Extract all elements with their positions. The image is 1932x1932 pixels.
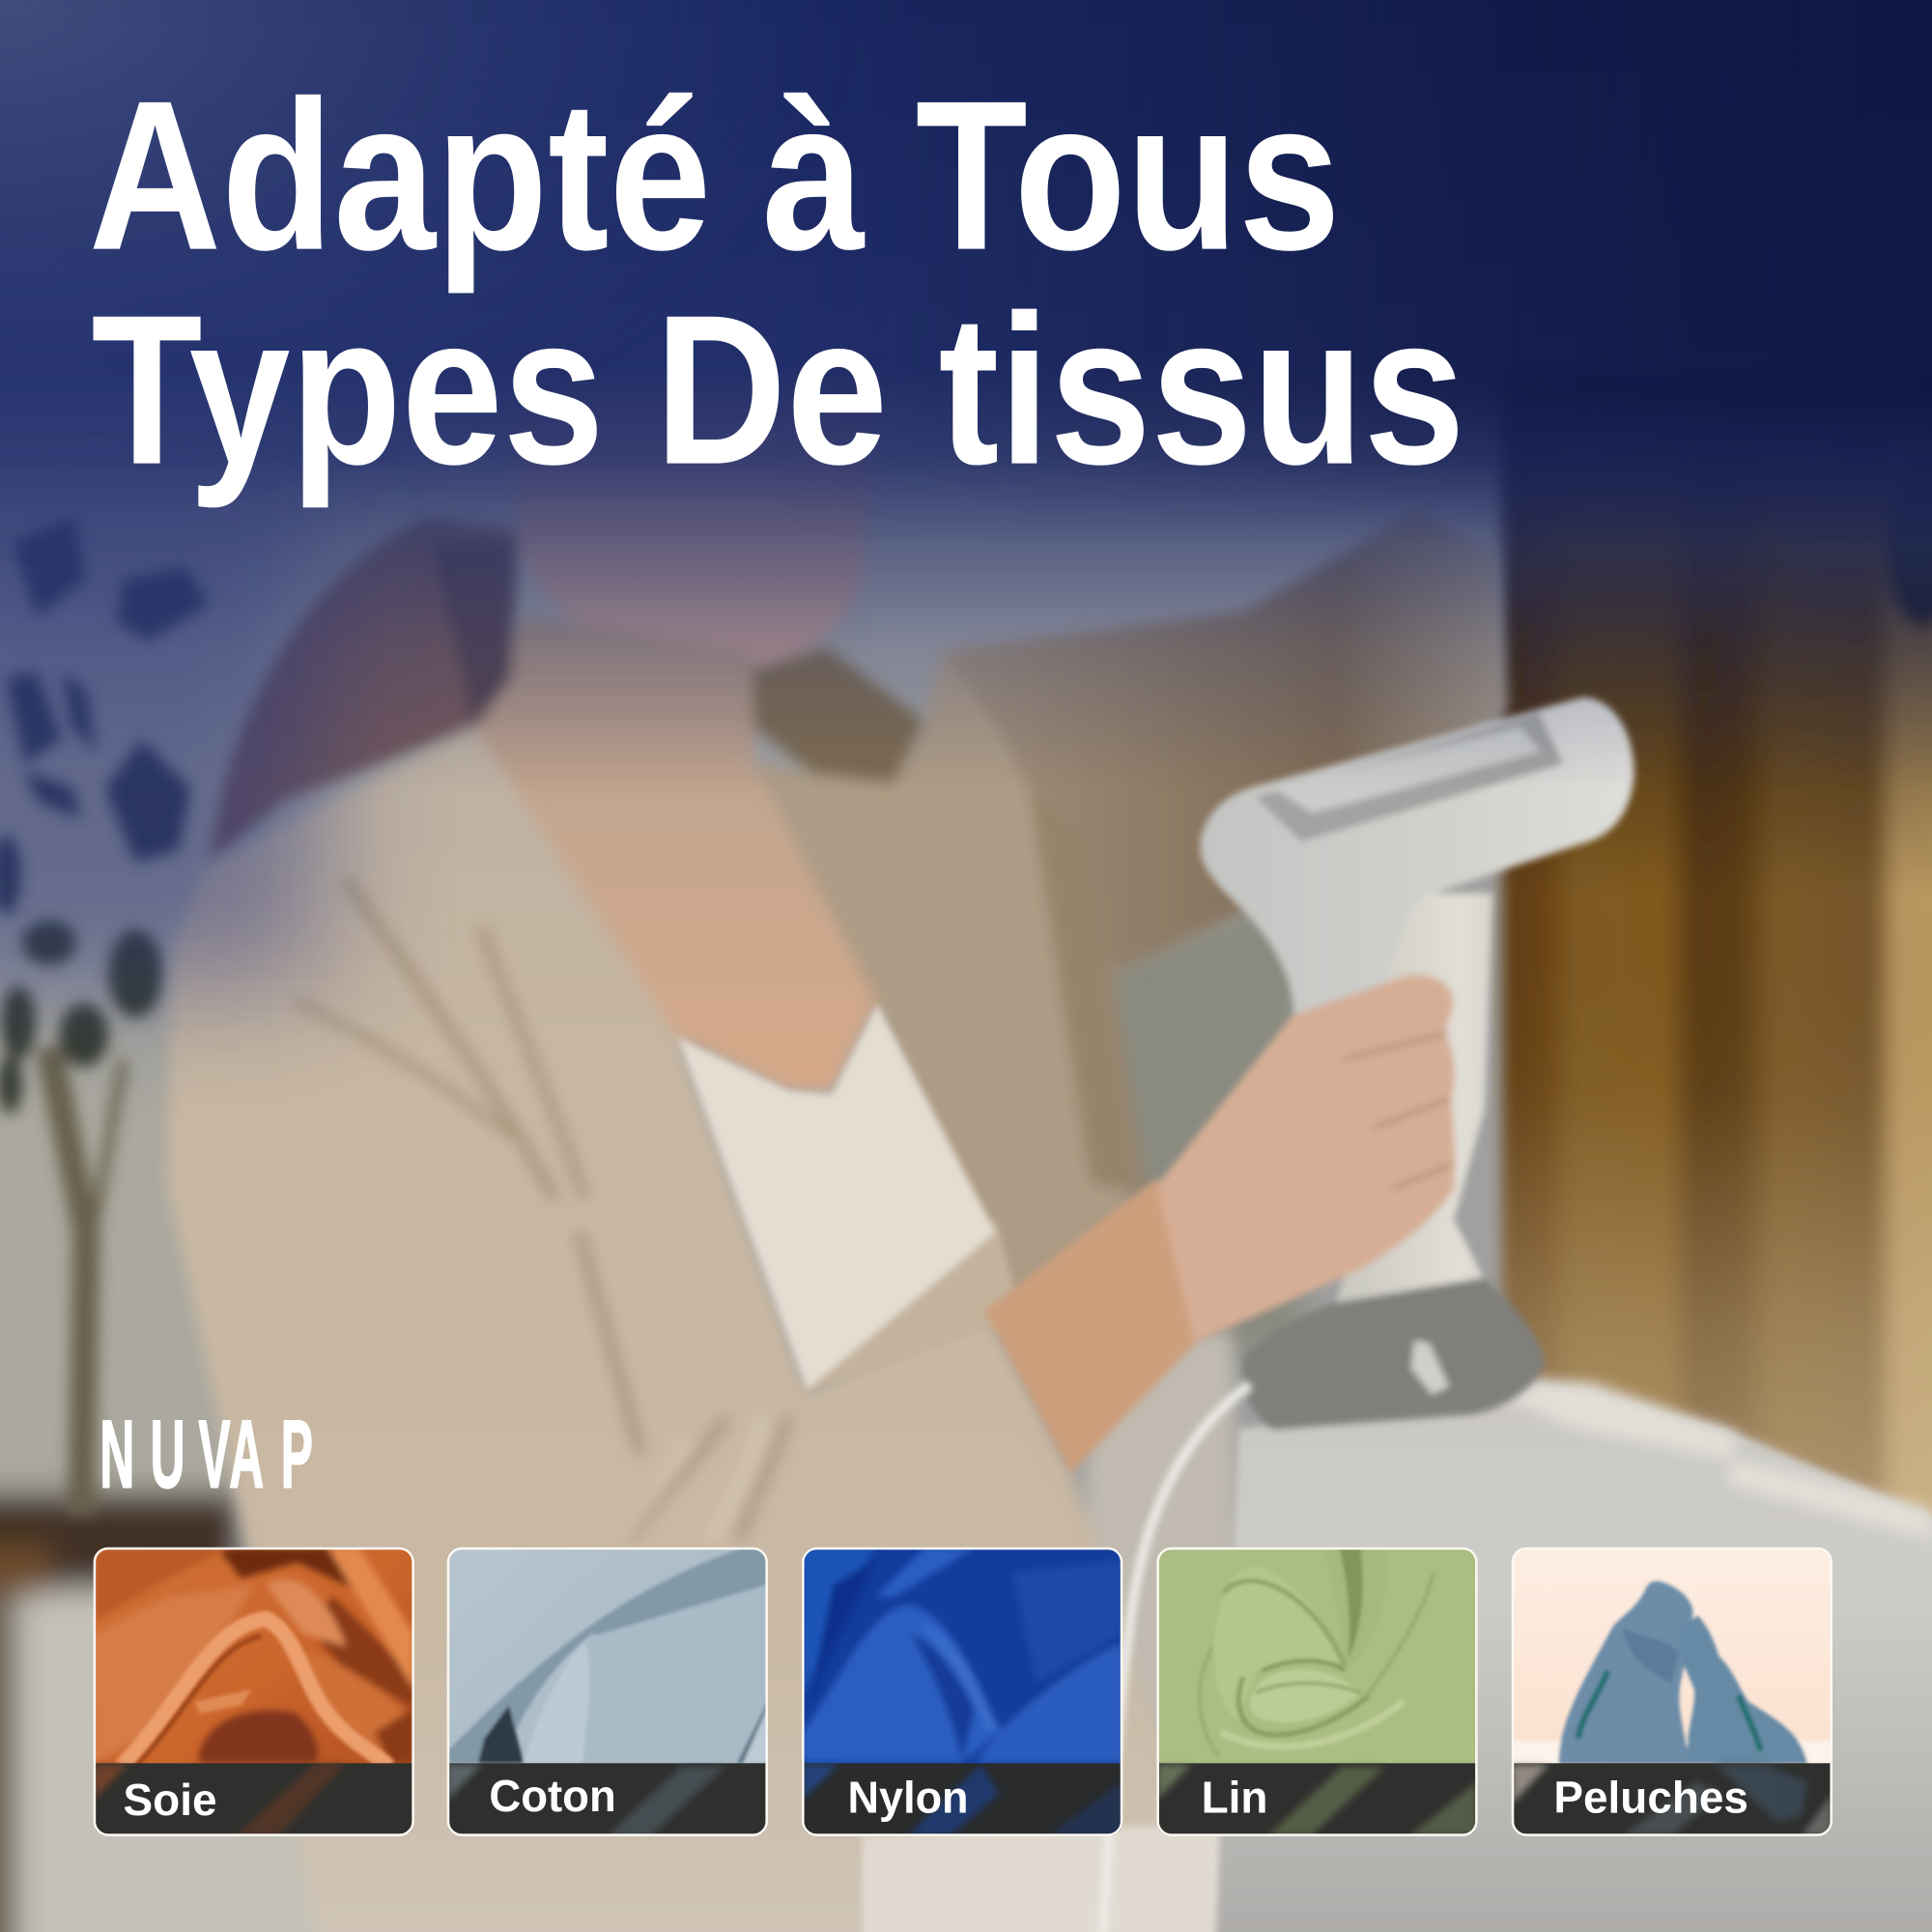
label band [94,1763,414,1836]
raised sleeve [943,513,1506,974]
title: Types De tissus [91,270,1465,509]
area beside sleeve [1084,1331,1244,1932]
base highlight [1410,1341,1449,1395]
steamer top panel [1274,727,1540,813]
steamer grey stripe [1256,712,1564,841]
cotton folds [447,1548,768,1763]
card border [95,1548,413,1835]
cardigan under top [788,1220,1023,1399]
label: Soie [124,1775,216,1825]
silk folds [94,1548,414,1763]
left sofa [18,1589,370,1932]
card border [1513,1548,1832,1835]
title: Adapté à Tous [89,56,1341,295]
cardigan fold lines [296,878,788,1540]
card: Lin [1157,1548,1477,1836]
card border [1158,1548,1476,1835]
wall under raised arm [1096,887,1306,1355]
upper wall [863,469,1503,666]
plant [0,518,210,1516]
forearm [984,1178,1198,1474]
cardigan pleats highlight [622,1417,764,1540]
card: Soie [94,1548,414,1836]
nylon folds [802,1548,1122,1763]
card: Coton [447,1548,768,1836]
navy gradient overlay [0,0,1932,985]
label band [1512,1763,1833,1836]
card: Nylon [802,1548,1122,1836]
board [1213,1380,1932,1932]
steamer base [1242,1278,1545,1430]
card border [803,1548,1122,1835]
white top [678,1005,996,1390]
main cardigan [166,727,1238,1932]
label band [802,1763,1122,1836]
face [515,370,877,667]
right cardigan panel [754,650,1133,1319]
steamer head [1200,697,1634,1018]
label band [447,1763,768,1836]
finger lines [1343,1033,1452,1189]
label: Peluches [1553,1772,1748,1822]
curtain [1502,370,1932,1540]
sofa gap [0,1589,14,1932]
label: Coton [489,1771,616,1821]
plant stems [49,1047,124,1516]
title [89,56,1465,509]
lower left wall [0,1010,234,1528]
label: Nylon [848,1772,969,1822]
plush toys [1512,1581,1833,1766]
left furniture [0,1493,241,1587]
hair right [746,647,924,783]
label: Lin [1202,1772,1267,1822]
linen swirl folds [1199,1548,1435,1757]
neck and chest [474,616,877,1092]
hair left [210,518,518,863]
plant leaves [0,518,210,914]
hand [1157,975,1455,1343]
board highlights [1479,1382,1932,1540]
power cord [1103,1385,1249,1932]
steamer handle [1336,894,1492,1301]
card border [448,1548,767,1835]
card: Peluches [1512,1548,1833,1836]
hair strand over neck [431,542,518,729]
brand logo: NUVAP [99,1401,313,1508]
label band [1157,1763,1477,1836]
lower shirt [863,1824,1244,1932]
